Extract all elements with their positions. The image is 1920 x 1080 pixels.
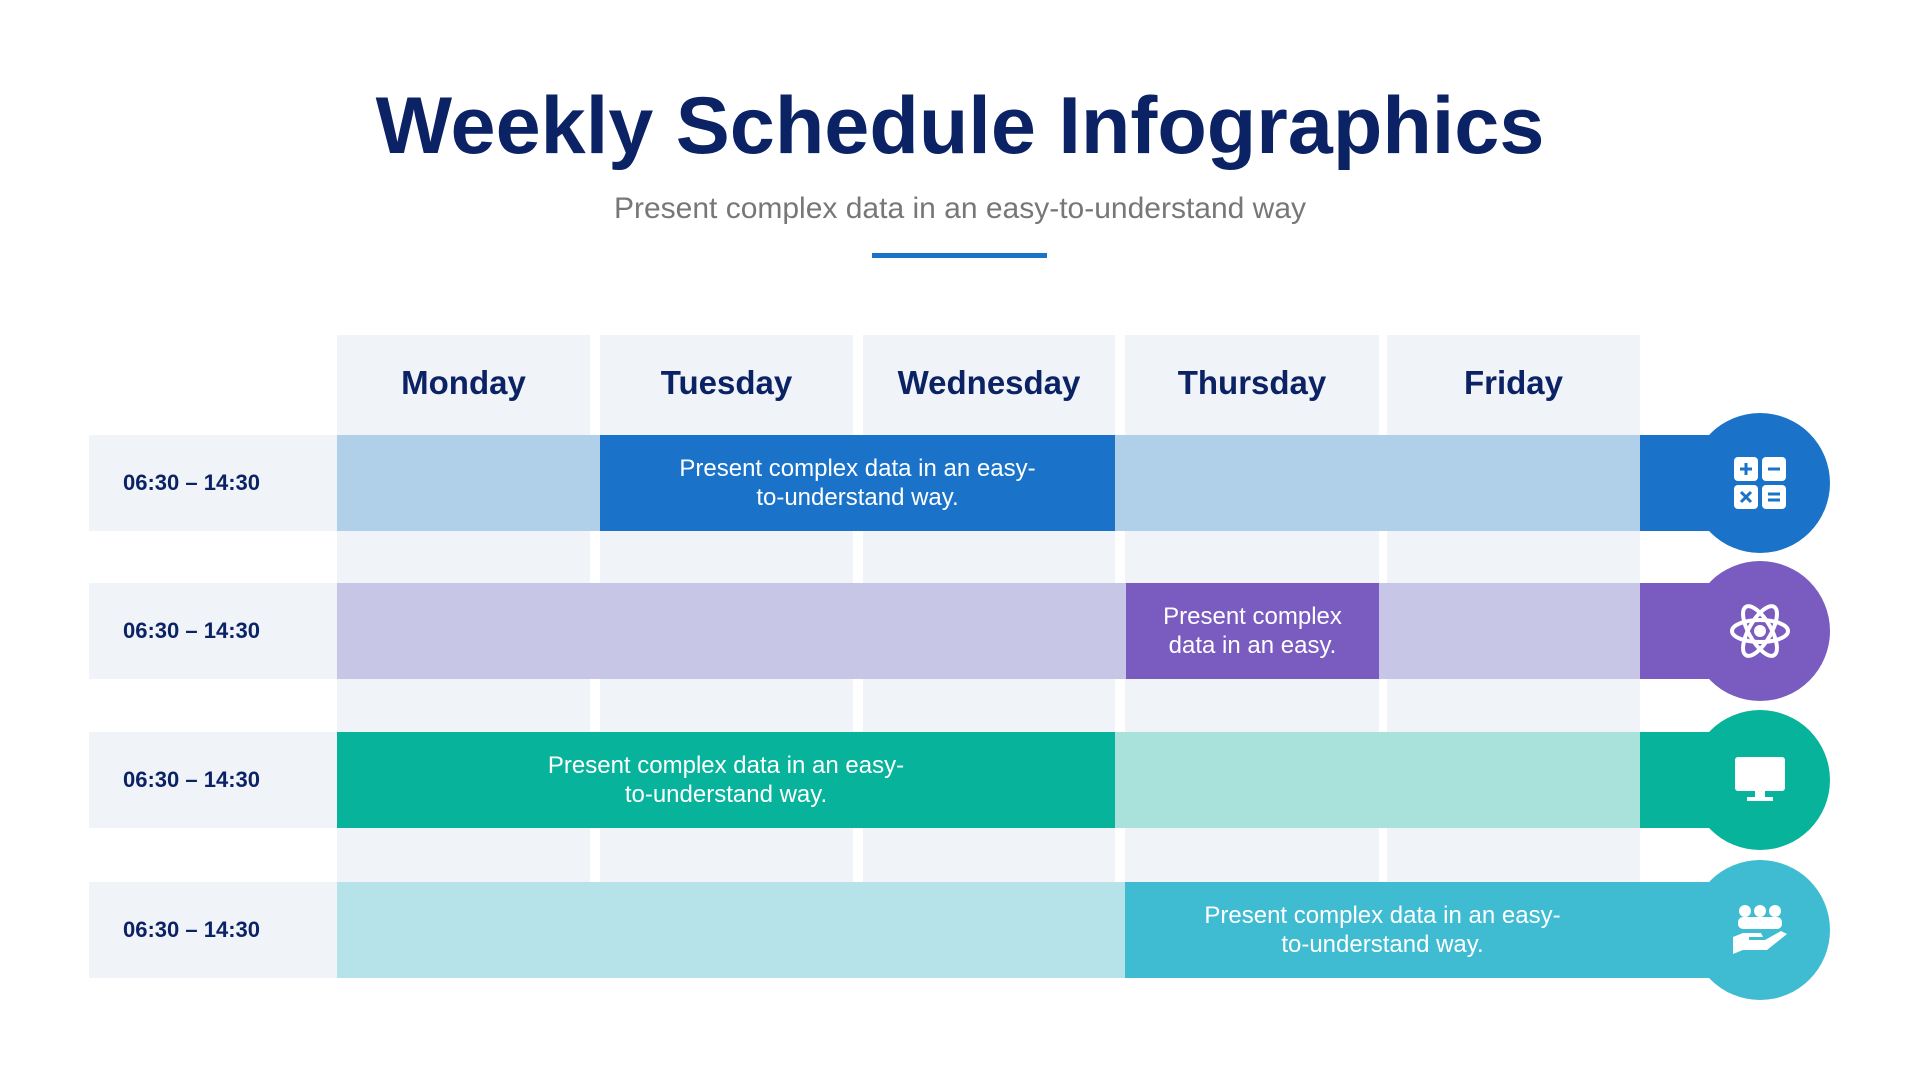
header: Wednesday: Wednesday (898, 364, 1080, 401)
row 3: 06:30 – 14:30 (123, 767, 260, 792)
row 1: 06:30 – 14:30 (123, 470, 260, 495)
row 1 (89, 413, 1830, 553)
block row 1: to-understand way. (756, 484, 959, 511)
block row 2 (1126, 583, 1379, 679)
subtitle: Present complex data in an easy-to-understand way (614, 192, 1306, 225)
block row 1: Present complex data in an easy- (679, 455, 1036, 482)
header: Monday: Monday (401, 364, 526, 401)
title: Weekly Schedule Infographics (376, 81, 1544, 171)
row 2 (89, 561, 1830, 701)
block row 4: to-understand way. (1281, 931, 1484, 958)
block row 4 (1125, 882, 1640, 978)
icon: calculator (1690, 413, 1830, 553)
row 3 (89, 710, 1830, 850)
icon: hand with people (1690, 860, 1830, 1000)
block row 2: data in an easy. (1169, 632, 1336, 659)
block row 3: to-understand way. (625, 781, 827, 808)
header: Thursday: Thursday (1178, 364, 1326, 401)
header: Friday: Friday (1464, 364, 1563, 401)
icon: atom (1690, 561, 1830, 701)
block row 4: Present complex data in an easy- (1204, 902, 1561, 929)
block row 2: Present complex (1163, 603, 1342, 630)
block row 3 (337, 732, 1115, 828)
icon: monitor (1690, 710, 1830, 850)
row 2: 06:30 – 14:30 (123, 618, 260, 643)
block row 1 (600, 435, 1115, 531)
block row 3: Present complex data in an easy- (548, 752, 904, 779)
row 4: 06:30 – 14:30 (123, 917, 260, 942)
accent line (872, 253, 1047, 258)
header: Tuesday: Tuesday (661, 364, 792, 401)
row 4 (89, 860, 1830, 1000)
